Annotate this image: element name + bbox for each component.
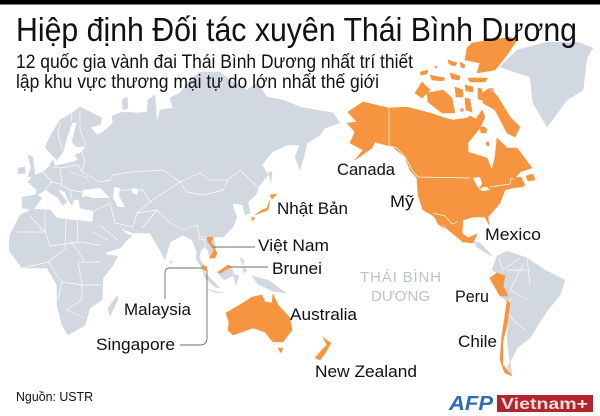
Canadian Arctic islands xyxy=(415,37,520,137)
Vietnam xyxy=(207,237,217,258)
subtitle: lập khu vực thương mại tự do lớn nhất thế giới xyxy=(16,72,379,93)
country labels: Brunei xyxy=(272,259,322,278)
top black bar xyxy=(0,0,600,4)
country labels: Mexico xyxy=(485,225,541,244)
subtitle xyxy=(16,52,414,93)
logo: AFP: AFP xyxy=(448,393,494,415)
Chile xyxy=(500,301,512,376)
country borders xyxy=(18,110,530,330)
ocean label: DƯƠNG xyxy=(371,288,430,305)
Japan xyxy=(252,194,277,221)
country labels: Nhật Bản xyxy=(277,199,348,218)
white seas xyxy=(82,187,138,207)
country labels: Malaysia xyxy=(124,300,192,319)
logo: Vietnam+: Vietnam+ xyxy=(501,396,588,413)
New Zealand xyxy=(315,337,331,360)
country labels: Mỹ xyxy=(390,192,415,211)
country labels: Việt Nam xyxy=(258,236,329,255)
subtitle: 12 quốc gia vành đai Thái Bình Dương nhất trí thiết xyxy=(16,52,414,73)
world map: non-member land xyxy=(9,42,593,376)
leader lines xyxy=(165,247,268,345)
Malaysia xyxy=(202,265,232,273)
ocean label: THÁI BÌNH xyxy=(360,269,441,286)
source: Nguồn: USTR xyxy=(16,389,93,404)
country labels: Chile xyxy=(458,332,497,351)
country labels xyxy=(96,160,541,381)
ocean label xyxy=(360,269,441,305)
country labels: Singapore xyxy=(96,335,175,354)
country labels: Canada xyxy=(337,160,396,179)
country labels: Australia xyxy=(290,305,358,324)
Australia xyxy=(226,294,292,353)
North America: Canada, USA, Mexico xyxy=(347,37,535,243)
member countries highlighted xyxy=(202,37,535,376)
country labels: New Zealand xyxy=(315,362,417,381)
Peru xyxy=(490,273,508,296)
country labels: Peru xyxy=(455,287,489,306)
